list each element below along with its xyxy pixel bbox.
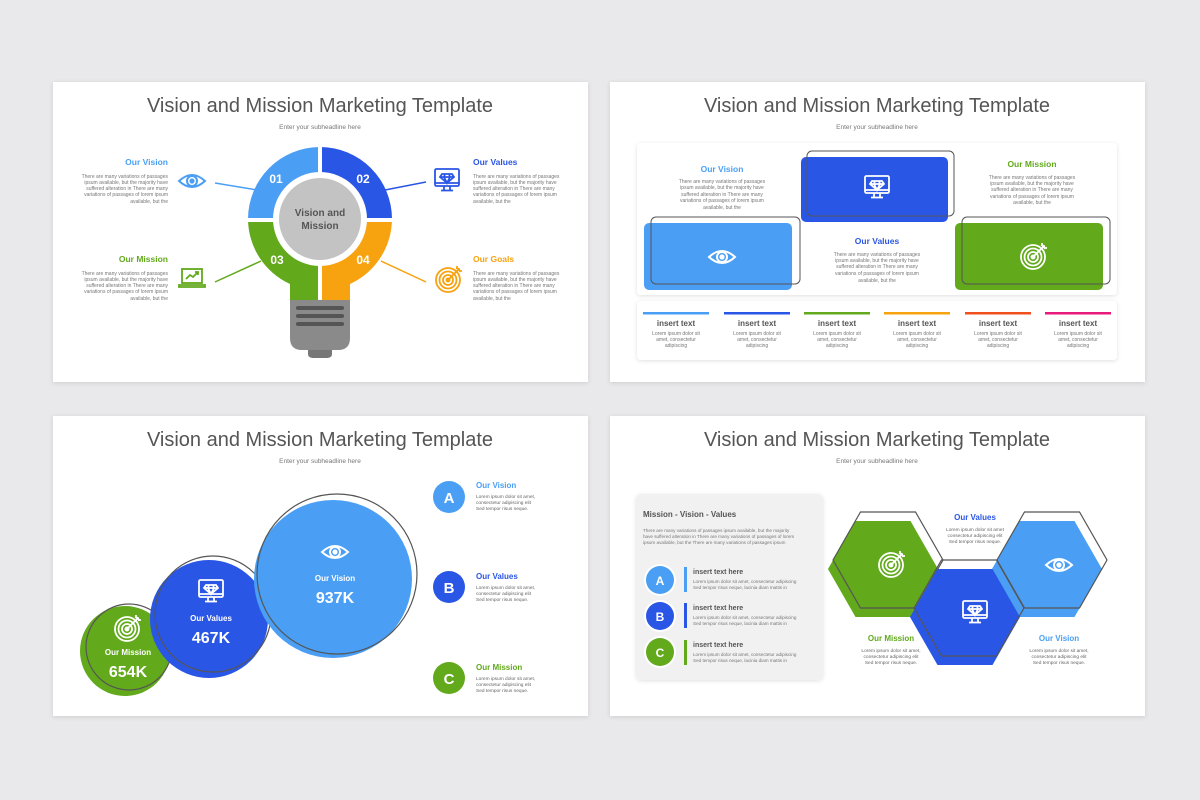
text: our values: suffered alteration in There are many xyxy=(473,186,555,192)
text: our vision: Our Vision xyxy=(125,157,168,167)
bottom card: six items: amet, consectetur xyxy=(1058,337,1098,343)
bottom card: six items: adipiscing xyxy=(906,343,928,349)
bottom card: six items: amet, consectetur xyxy=(737,337,777,343)
circle: our values: Our Values xyxy=(190,614,232,623)
icon: eye xyxy=(709,251,735,263)
list item B: Our Values xyxy=(476,572,518,581)
bottom card: six items: Lorem ipsum dolor sit xyxy=(1054,331,1103,337)
list item C: C xyxy=(444,671,455,688)
side card: ipsum available, but the There are many variations of passages ipsum xyxy=(643,540,786,545)
text: our vision: ipsum available, but the majority have xyxy=(84,180,168,186)
text: our mission: variations of passages of lorem ipsum xyxy=(990,194,1074,200)
top card xyxy=(637,143,1117,295)
bottom card: six items: adipiscing xyxy=(987,343,1009,349)
list item B: B xyxy=(444,580,455,597)
text: our vision: Our Vision xyxy=(701,164,743,174)
list item A: Sed tempor risus neque. xyxy=(476,506,528,512)
text: our goals: variations of passages of lorem ipsum xyxy=(473,289,557,295)
text: our values: ipsum available, but the majority have xyxy=(835,258,919,264)
text: our vision: variations of passages of lorem ipsum xyxy=(84,192,168,198)
subtitle: Enter your subheadline here xyxy=(836,124,918,131)
list item A: Lorem ipsum dolor sit amet, xyxy=(476,494,535,500)
bottom card: six items: Lorem ipsum dolor sit xyxy=(974,331,1023,337)
item A: A xyxy=(656,574,665,588)
text: our values xyxy=(946,513,1005,545)
text: our values: available, but the xyxy=(858,278,896,284)
lightbulb diagram: 02 xyxy=(356,172,370,186)
text: our mission xyxy=(989,159,1076,206)
text: our values: Our Values xyxy=(473,157,518,167)
text: our vision xyxy=(1029,634,1089,666)
lightbulb diagram: 04 xyxy=(356,253,370,267)
list item C: Our Mission xyxy=(476,663,522,672)
title: Vision and Mission Marketing Template xyxy=(704,95,1050,117)
bottom card: six items: adipiscing xyxy=(1067,343,1089,349)
text: our vision: Lorem ipsum dolor sit amet, xyxy=(1029,648,1089,654)
side card xyxy=(636,494,823,680)
list item B: Sed tempor risus neque. xyxy=(476,597,528,603)
connector lines xyxy=(215,182,426,282)
icon: target xyxy=(1021,243,1047,269)
text: our mission: ipsum available, but the majority have xyxy=(84,277,168,283)
item A: Sed tempor risus neque, lacinia diam mattis in xyxy=(693,585,787,590)
item B: insert text here xyxy=(693,605,743,612)
title: Vision and Mission Marketing Template xyxy=(147,95,493,117)
text: our values: ipsum available, but the majority have xyxy=(473,180,557,186)
bottom card: six items: insert text xyxy=(898,319,936,328)
panel: hexagon slide xyxy=(610,416,1145,716)
text: our mission xyxy=(82,254,168,302)
text: our vision: Sed tempor risus neque. xyxy=(1033,660,1085,666)
text: our values: There are many variations of passages xyxy=(473,174,560,180)
circle: our values xyxy=(150,556,271,678)
text: our mission: available, but the xyxy=(130,296,168,302)
subtitle: Enter your subheadline here xyxy=(279,458,361,465)
circle: our mission xyxy=(80,604,172,696)
bottom card: six items: insert text xyxy=(657,319,695,328)
bottom card: six items: Lorem ipsum dolor sit xyxy=(893,331,942,337)
item B: Lorem ipsum dolor sit amet, consectetur adipiscing xyxy=(693,615,797,620)
title: Vision and Mission Marketing Template xyxy=(704,429,1050,451)
list item A xyxy=(433,481,535,513)
item B xyxy=(644,600,797,632)
text: our goals: available, but the xyxy=(473,296,511,302)
lightbulb diagram: 01 xyxy=(269,172,283,186)
icon: monitor xyxy=(435,169,459,190)
list item A: Our Vision xyxy=(476,481,516,490)
text: our mission: There are many variations of passages xyxy=(82,271,168,277)
item B: B xyxy=(656,610,665,624)
item C: C xyxy=(656,646,665,660)
text: our values: Our Values xyxy=(855,236,899,246)
lightbulb diagram: Vision and xyxy=(295,208,345,219)
text: our goals: Our Goals xyxy=(473,254,514,264)
item A xyxy=(644,564,797,596)
text: our values xyxy=(834,236,921,284)
bottom card: six items: insert text xyxy=(979,319,1017,328)
bottom card: six items: adipiscing xyxy=(746,343,768,349)
circle: our values: 467K xyxy=(192,630,231,647)
bottom card: six items: Lorem ipsum dolor sit xyxy=(813,331,862,337)
item C: Lorem ipsum dolor sit amet, consectetur adipiscing xyxy=(693,652,797,657)
bottom card: six items: adipiscing xyxy=(665,343,687,349)
title: Vision and Mission Marketing Template xyxy=(147,429,493,451)
text: our vision: variations of passages of lorem ipsum xyxy=(680,198,764,204)
list item C: Sed tempor risus neque. xyxy=(476,688,528,694)
lightbulb diagram xyxy=(240,140,400,358)
item A: Lorem ipsum dolor sit amet, consectetur adipiscing xyxy=(693,579,797,584)
list item B: consectetur adipiscing elit xyxy=(476,591,532,597)
list item C: consectetur adipiscing elit xyxy=(476,682,532,688)
text: our values: Lorem ipsum dolor sit amet xyxy=(946,527,1005,533)
subtitle: Enter your subheadline here xyxy=(279,124,361,131)
bottom card: six items: insert text xyxy=(738,319,776,328)
text: our values: suffered alteration in There are many xyxy=(836,264,918,270)
text: our vision xyxy=(82,157,168,205)
list item C xyxy=(433,662,535,694)
text: our goals: suffered alteration in There are many xyxy=(473,283,555,289)
panel: lightbulb slide xyxy=(53,82,588,382)
circle: our mission: 654K xyxy=(109,664,148,681)
bottom card: six items: amet, consectetur xyxy=(817,337,857,343)
text: our mission: consectetur adipiscing elit xyxy=(864,654,919,660)
panel: circles slide xyxy=(53,416,588,716)
text: our vision: suffered alteration in There are many xyxy=(86,186,168,192)
text: our values: variations of passages of lorem ipsum xyxy=(835,271,919,277)
text: our mission: suffered alteration in There are many xyxy=(86,283,168,289)
circle: our mission: Our Mission xyxy=(105,648,151,657)
text: our mission: There are many variations of passages xyxy=(989,175,1076,181)
side card: Mission - Vision - Values xyxy=(643,510,737,519)
text: our goals: There are many variations of passages xyxy=(473,271,560,277)
text: our mission xyxy=(861,634,921,666)
text: our mission: available, but the xyxy=(1013,200,1051,206)
list item C: Lorem ipsum dolor sit amet, xyxy=(476,676,535,682)
item C xyxy=(644,636,797,668)
icon: chart laptop xyxy=(179,269,205,287)
hexagon: vision (light blue) xyxy=(992,512,1107,617)
item A: insert text here xyxy=(693,569,743,576)
text: our vision: available, but the xyxy=(703,205,741,211)
side card: have suffered alteration in There are many variations of passages of lorem xyxy=(643,534,794,539)
text: our values: variations of passages of lorem ipsum xyxy=(473,192,557,198)
bottom card: six items: amet, consectetur xyxy=(978,337,1018,343)
text: our mission: Sed tempor risus neque. xyxy=(865,660,917,666)
text: our vision: There are many variations of passages xyxy=(679,179,766,185)
text: our values xyxy=(473,157,560,205)
text: our mission: suffered alteration in There are many xyxy=(991,187,1073,193)
bottom card: six items: insert text xyxy=(1059,319,1097,328)
text: our mission: Our Mission xyxy=(119,254,168,264)
circle: our vision xyxy=(254,494,417,658)
side card: There are many variations of passages ipsum available, but the majority xyxy=(643,528,790,533)
bottom card: six items: amet, consectetur xyxy=(897,337,937,343)
item C: Sed tempor risus neque, lacinia diam mattis in xyxy=(693,658,787,663)
text: our mission: variations of passages of lorem ipsum xyxy=(84,289,168,295)
bottom card: six items: Lorem ipsum dolor sit xyxy=(652,331,701,337)
text: our vision: There are many variations of passages xyxy=(82,174,168,180)
text: our vision: suffered alteration in There are many xyxy=(681,192,763,198)
text: our vision: consectetur adipiscing elit xyxy=(1032,654,1087,660)
list item B: Lorem ipsum dolor sit amet, xyxy=(476,585,535,591)
text: our values: consectetur adipiscing elit xyxy=(948,533,1003,539)
hexagon: values (dark blue) xyxy=(910,560,1024,665)
item C: insert text here xyxy=(693,642,743,649)
text: our goals xyxy=(473,254,560,302)
text: our mission: Our Mission xyxy=(1007,159,1057,169)
text: our values: Sed tempor risus neque. xyxy=(949,539,1001,545)
list item A: consectetur adipiscing elit xyxy=(476,500,532,506)
panel: boxes slide xyxy=(610,82,1145,382)
list item B xyxy=(433,571,535,603)
text: our mission: Our Mission xyxy=(868,634,914,643)
text: our vision: Our Vision xyxy=(1039,634,1079,643)
lightbulb diagram: Mission xyxy=(301,221,339,232)
bottom card: six items: amet, consectetur xyxy=(656,337,696,343)
text: our mission: ipsum available, but the majority have xyxy=(990,181,1074,187)
bottom card: six items: adipiscing xyxy=(826,343,848,349)
circle: our vision: Our Vision xyxy=(315,574,355,583)
bottom card: six items: Lorem ipsum dolor sit xyxy=(733,331,782,337)
text: our values: Our Values xyxy=(954,513,996,522)
icon: target xyxy=(436,266,462,292)
text: our vision: ipsum available, but the majority have xyxy=(680,185,764,191)
text: our goals: ipsum available, but the majority have xyxy=(473,277,557,283)
item B: Sed tempor risus neque, lacinia diam mattis in xyxy=(693,621,787,626)
lightbulb diagram: 03 xyxy=(270,253,284,267)
icon: eye xyxy=(179,175,205,187)
text: our values: There are many variations of passages xyxy=(834,252,921,258)
icon: monitor xyxy=(865,176,889,198)
text: our values: available, but the xyxy=(473,199,511,205)
bottom card: six items: insert text xyxy=(818,319,856,328)
list item A: A xyxy=(444,490,455,507)
subtitle: Enter your subheadline here xyxy=(836,458,918,465)
hexagon: mission (green) xyxy=(828,512,943,617)
text: our vision xyxy=(679,164,766,211)
text: our vision: available, but the xyxy=(130,199,168,205)
bottom card: six items xyxy=(637,301,1117,360)
text: our mission: Lorem ipsum dolor sit amet, xyxy=(861,648,921,654)
circle: our vision: 937K xyxy=(316,590,355,607)
